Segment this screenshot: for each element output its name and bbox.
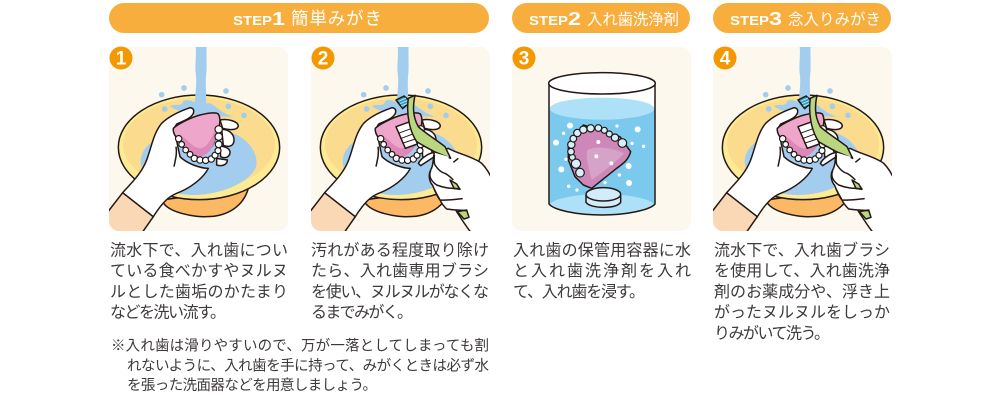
badge: number 3 [512,46,536,70]
header: STEP3 念入りみがき: 念入りみがき [788,10,881,28]
text block: step 1 instructions: 流水下で、入れ歯につい [110,242,288,260]
badge: number 4: 4 [720,48,731,70]
text block: step 2 instructions: 汚れがある程度取り除け [311,242,489,260]
illustration: brushing denture over basin, step 3 [711,47,895,233]
text block: step 3 instructions: て、入れ歯を浸す。 [513,283,645,301]
text block: step 1 instructions: などを洗い流す。 [110,304,226,322]
text block: step 4 instructions [714,240,890,342]
header: STEP2 入れ歯洗浄剤 [512,3,690,33]
illustration: glass with denture and tablet [549,73,655,215]
panel 1: rinsing denture under running water [107,46,288,233]
text block: step 2 instructions: たら、入れ歯専用ブラシ [311,261,489,280]
header: STEP3 念入りみがき [713,3,891,33]
note: caution about slippery dentures: れないように、入れ歯を手に持って、みがくときは必ず水 [127,358,490,374]
panel 3: soaking denture in cleanser [512,46,691,231]
header: STEP2 入れ歯洗浄剤: STEP [529,13,568,28]
text block: step 2 instructions: を使い、ヌルヌルがなくな [311,283,489,301]
header: STEP1 簡単みがき: 簡単みがき [291,8,382,28]
note: caution about slippery dentures [111,338,490,394]
text block: step 4 instructions: 流水下で、入れ歯ブラシ [714,240,890,260]
header: STEP3 念入りみがき: STEP [730,13,769,28]
panel 4: thorough brushing under running water [711,46,895,233]
text block: step 1 instructions [110,242,288,322]
note: caution about slippery dentures: を張った洗面器などを用意しましょう。 [127,377,377,394]
badge: number 1 [110,46,132,70]
text block: step 1 instructions: ている食べかすやヌルヌ [110,262,288,280]
text block: step 4 instructions: がったヌルヌルをしっか [714,304,890,322]
text block: step 3 instructions: 入れ歯の保管用容器に水 [513,242,691,260]
badge: number 3: 3 [519,48,529,70]
text block: step 4 instructions: を使用して、入れ歯洗浄 [714,262,890,280]
text block: step 2 instructions: るまでみがく。 [311,304,413,322]
header: STEP2 入れ歯洗浄剤: 2 [568,9,581,29]
badge: number 2: 2 [318,48,328,70]
header: STEP1 簡単みがき: STEP [233,13,272,28]
text block: step 4 instructions: 剤のお薬成分や、浮き上 [714,283,890,301]
header: STEP3 念入りみがき: 3 [769,9,782,29]
text block: step 1 instructions: ルとした歯垢のかたまり [110,283,288,301]
text block: step 2 instructions [311,242,489,322]
text block: step 3 instructions: と入れ歯洗浄剤を入れ [513,262,691,280]
text block: step 4 instructions: りみがいて洗う。 [714,324,830,342]
badge: number 1: 1 [116,48,127,70]
note: caution about slippery dentures: ※入れ歯は滑りやすいので、万が一落としてしまっても割 [111,338,489,354]
panel 2: brushing denture with denture brush [309,46,493,233]
badge: number 2 [312,46,334,70]
header: STEP1 簡単みがき [109,3,489,33]
text block: step 3 instructions [513,242,691,301]
header: STEP1 簡単みがき: 1 [272,9,285,29]
illustration: hand holding denture over basin [107,47,280,233]
header: STEP2 入れ歯洗浄剤: 入れ歯洗浄剤 [587,10,679,28]
illustration: brushing denture over basin [309,47,493,233]
badge: number 4 [714,46,736,70]
